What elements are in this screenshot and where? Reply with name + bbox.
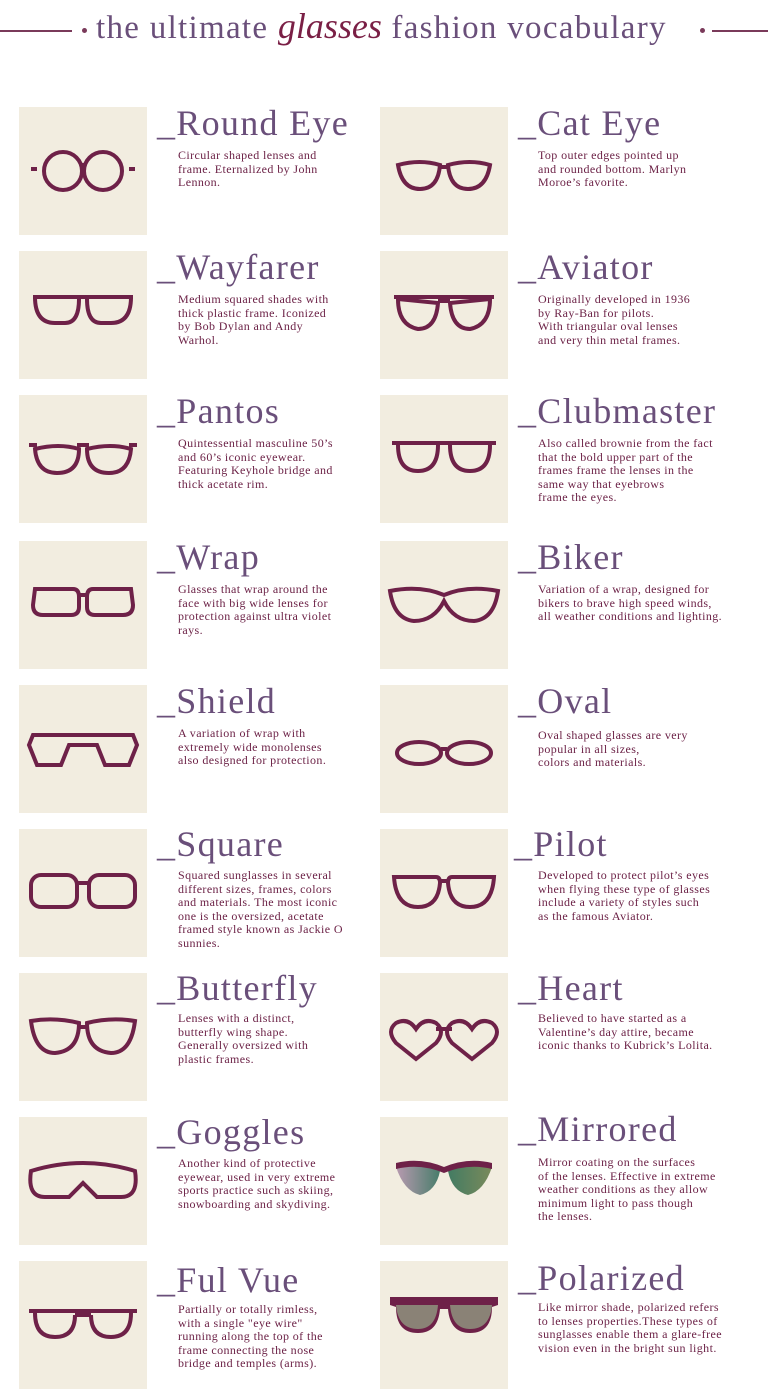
text: thick plastic frame. Iconized bbox=[178, 306, 326, 320]
text: _Polarized bbox=[518, 1258, 685, 1298]
text: Another kind of protective bbox=[178, 1156, 316, 1170]
text: sunglasses enable them a glare-free bbox=[538, 1327, 722, 1341]
text: butterfly wing shape. bbox=[178, 1025, 288, 1039]
text: to lenses properties.These types of bbox=[538, 1314, 718, 1328]
card: Aviator bbox=[380, 247, 690, 379]
text: _Cat Eye bbox=[518, 103, 661, 143]
text: weather conditions as they allow bbox=[538, 1182, 708, 1196]
text: when flying these type of glasses bbox=[538, 882, 710, 896]
text: A variation of wrap with bbox=[178, 726, 306, 740]
text: Believed to have started as a bbox=[538, 1011, 687, 1025]
text: With triangular oval lenses bbox=[538, 319, 678, 333]
card: Oval bbox=[380, 681, 688, 813]
text: _Pilot bbox=[514, 824, 608, 864]
text: iconic thanks to Kubrick’s Lolita. bbox=[538, 1038, 713, 1052]
card: Wrap bbox=[19, 537, 331, 669]
text: rays. bbox=[178, 623, 203, 637]
text: frame. Eternalized by John bbox=[178, 162, 318, 176]
card: Biker bbox=[380, 537, 722, 669]
text: Developed to protect pilot’s eyes bbox=[538, 868, 709, 882]
card: Butterfly bbox=[19, 968, 318, 1101]
text: one is the oversized, acetate bbox=[178, 909, 324, 923]
text: popular in all sizes, bbox=[538, 742, 640, 756]
text: extremely wide monolenses bbox=[178, 740, 322, 754]
text: and 60’s iconic eyewear. bbox=[178, 450, 306, 464]
card: Mirrored bbox=[380, 1109, 716, 1245]
text: snowboarding and skydiving. bbox=[178, 1197, 330, 1211]
text: minimum light to pass though bbox=[538, 1196, 693, 1210]
card: Round Eye bbox=[19, 103, 349, 235]
text: of the lenses. Effective in extreme bbox=[538, 1169, 716, 1183]
text: also designed for protection. bbox=[178, 753, 326, 767]
text: _Butterfly bbox=[157, 968, 318, 1008]
text: face with big wide lenses for bbox=[178, 596, 328, 610]
text: include a variety of styles such bbox=[538, 895, 699, 909]
text: running along the top of the bbox=[178, 1329, 323, 1343]
text: protection against ultra violet bbox=[178, 609, 331, 623]
text: colors and materials. bbox=[538, 755, 646, 769]
text: Featuring Keyhole bridge and bbox=[178, 463, 333, 477]
text: Squared sunglasses in several bbox=[178, 868, 332, 882]
text: with a single "eye wire" bbox=[178, 1316, 303, 1330]
text: Partially or totally rimless, bbox=[178, 1302, 318, 1316]
text: Lenses with a distinct, bbox=[178, 1011, 295, 1025]
text: sports practice such as skiing, bbox=[178, 1183, 333, 1197]
text: same way that eyebrows bbox=[538, 477, 664, 491]
card: Clubmaster bbox=[380, 391, 716, 523]
text: Originally developed in 1936 bbox=[538, 292, 690, 306]
text: Also called brownie from the fact bbox=[538, 436, 713, 450]
text: Circular shaped lenses and bbox=[178, 148, 317, 162]
text: _Wayfarer bbox=[157, 247, 320, 287]
text: bikers to brave high speed winds, bbox=[538, 596, 712, 610]
card: Cat Eye bbox=[380, 103, 686, 235]
text: _Shield bbox=[157, 681, 276, 721]
text: _Oval bbox=[518, 681, 612, 721]
text: _Clubmaster bbox=[518, 391, 716, 431]
text: thick acetate rim. bbox=[178, 477, 268, 491]
card: Heart bbox=[380, 968, 713, 1101]
text: bridge and temples (arms). bbox=[178, 1356, 317, 1370]
text: Variation of a wrap, designed for bbox=[538, 582, 709, 596]
text: _Goggles bbox=[157, 1112, 305, 1152]
text: Like mirror shade, polarized refers bbox=[538, 1300, 719, 1314]
text: by Ray-Ban for pilots. bbox=[538, 306, 654, 320]
text: _Pantos bbox=[157, 391, 280, 431]
text: and very thin metal frames. bbox=[538, 333, 680, 347]
text: _Round Eye bbox=[157, 103, 349, 143]
text: as the famous Aviator. bbox=[538, 909, 653, 923]
text: _Heart bbox=[518, 968, 624, 1008]
text: frames frame the lenses in the bbox=[538, 463, 694, 477]
text: Generally oversized with bbox=[178, 1038, 308, 1052]
text: Oval shaped glasses are very bbox=[538, 728, 688, 742]
text: Mirror coating on the surfaces bbox=[538, 1155, 695, 1169]
text: vision even in the bright sun light. bbox=[538, 1341, 717, 1355]
text: _Biker bbox=[518, 537, 624, 577]
text: _Square bbox=[157, 824, 284, 864]
text: Warhol. bbox=[178, 333, 219, 347]
text: Lennon. bbox=[178, 175, 220, 189]
text: different sizes, frames, colors bbox=[178, 882, 332, 896]
title: the ultimate glasses fashion vocabulary bbox=[96, 6, 667, 46]
text: _Ful Vue bbox=[157, 1260, 300, 1300]
text: eyewear, used in very extreme bbox=[178, 1170, 335, 1184]
card: Shield bbox=[19, 681, 326, 813]
text: Moroe’s favorite. bbox=[538, 175, 628, 189]
card: Ful Vue bbox=[19, 1260, 323, 1389]
text: Valentine’s day attire, became bbox=[538, 1025, 694, 1039]
card: Goggles bbox=[19, 1112, 335, 1245]
text: Medium squared shades with bbox=[178, 292, 329, 306]
card: Pantos bbox=[19, 391, 333, 523]
text: sunnies. bbox=[178, 936, 220, 950]
text: and materials. The most iconic bbox=[178, 895, 337, 909]
card: Pilot bbox=[380, 824, 710, 957]
card: Square bbox=[19, 824, 343, 957]
text: all weather conditions and lighting. bbox=[538, 609, 722, 623]
text: that the bold upper part of the bbox=[538, 450, 693, 464]
text: frame connecting the nose bbox=[178, 1343, 314, 1357]
text: _Wrap bbox=[157, 537, 260, 577]
card: Polarized bbox=[380, 1258, 722, 1389]
text: frame the eyes. bbox=[538, 490, 617, 504]
text: framed style known as Jackie O bbox=[178, 922, 343, 936]
text: Top outer edges pointed up bbox=[538, 148, 679, 162]
text: Quintessential masculine 50’s bbox=[178, 436, 333, 450]
text: and rounded bottom. Marlyn bbox=[538, 162, 686, 176]
text: plastic frames. bbox=[178, 1052, 254, 1066]
text: _Mirrored bbox=[518, 1109, 678, 1149]
text: _Aviator bbox=[518, 247, 654, 287]
card: Wayfarer bbox=[19, 247, 329, 379]
text: Glasses that wrap around the bbox=[178, 582, 328, 596]
text: by Bob Dylan and Andy bbox=[178, 319, 303, 333]
text: the lenses. bbox=[538, 1209, 592, 1223]
